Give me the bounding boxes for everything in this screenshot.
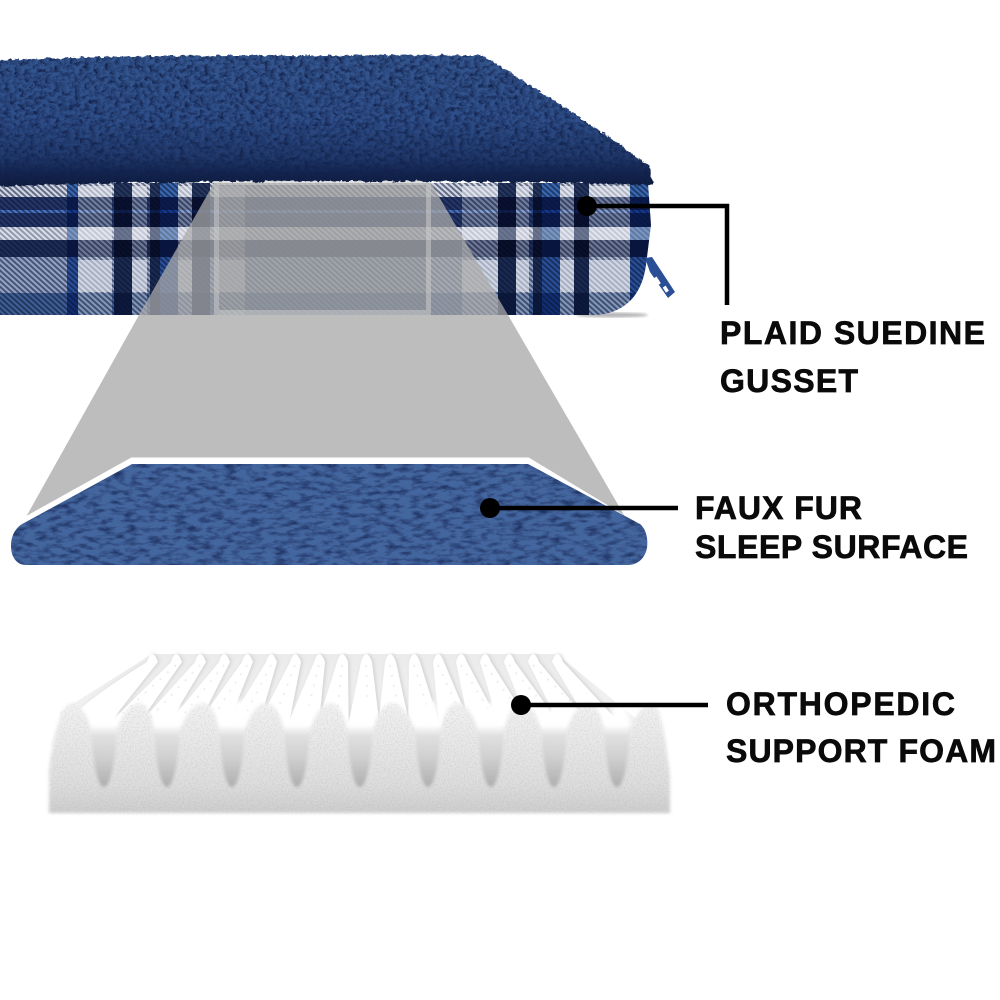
icon: zipper pull [645, 257, 675, 298]
foam valleys [60, 725, 660, 791]
callout: faux fur sleep surface [480, 490, 968, 565]
label: orthopedic support foam: ORTHOPEDIC [726, 686, 955, 722]
label: faux fur sleep surface: SLEEP SURFACE [695, 529, 968, 565]
panel: faux fur sleep surface slab [0, 455, 660, 570]
label: orthopedic support foam: SUPPORT FOAM [726, 733, 996, 769]
gusset shadow [576, 312, 648, 318]
mattress: faux fur top [0, 55, 653, 186]
label: faux fur sleep surface: FAUX FUR [695, 490, 862, 526]
label: orthopedic support foam [726, 686, 996, 769]
gray magnifying projection beam [26, 180, 624, 517]
label: plaid suedine gusset: PLAID SUEDINE [720, 315, 985, 351]
callout: orthopedic support foam [511, 686, 996, 769]
label: plaid suedine gusset [720, 315, 985, 399]
label: faux fur sleep surface [695, 490, 968, 565]
foam front face [49, 703, 670, 813]
foam second-row cones [92, 700, 633, 745]
panel: orthopedic support foam [49, 654, 670, 813]
foam ridges [52, 654, 640, 760]
label: plaid suedine gusset: GUSSET [720, 363, 858, 399]
inset plaid swatch frame [214, 180, 431, 315]
mattress: plaid gusset [0, 183, 660, 318]
callout: plaid suedine gusset [577, 196, 985, 399]
